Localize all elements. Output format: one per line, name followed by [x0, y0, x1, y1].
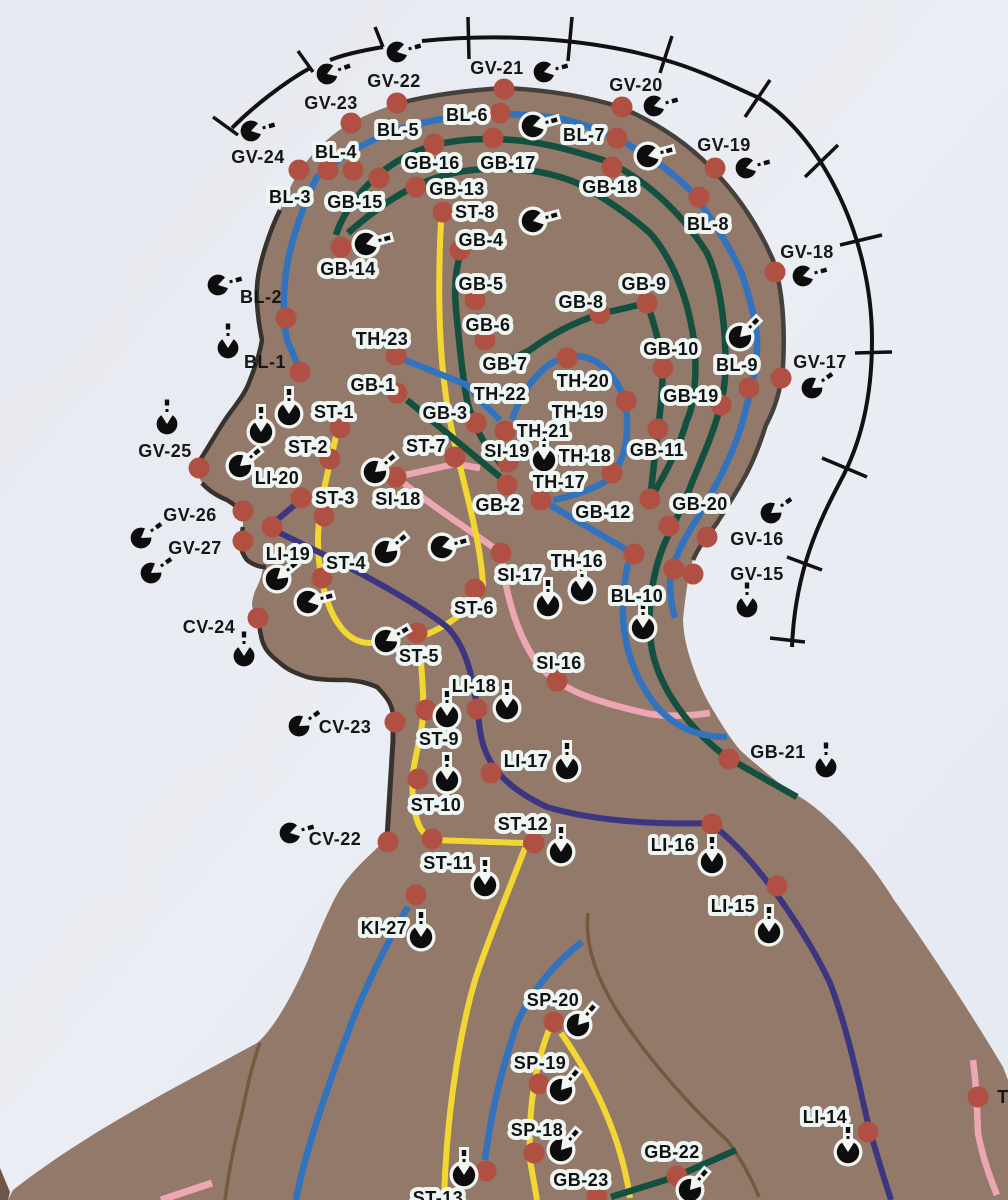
point labels on the body: GB-14: [320, 259, 376, 279]
point labels on the body: GB-5: [458, 274, 504, 294]
meridian: blue bladder and triple heater: [284, 114, 757, 1200]
point labels on the body: BL-8: [687, 214, 729, 234]
meridian: purple large intestine: [277, 503, 891, 1200]
point labels outside the body: GV-17: [793, 352, 847, 372]
point labels on the body: LI-16: [651, 835, 695, 855]
point labels outside the body: GV-27: [168, 538, 222, 558]
point labels on the body: BL-7: [563, 125, 605, 145]
point labels on the body: SP-20: [527, 990, 579, 1010]
point labels on the body: BL-4: [315, 142, 357, 162]
point labels on the body: GB-18: [582, 177, 638, 197]
needle icons outside the body: [127, 36, 838, 846]
point labels on the body: KI-27: [361, 918, 407, 938]
point labels on the body: LI-19: [266, 544, 310, 564]
point labels on the body: TH-17: [533, 472, 585, 492]
point labels on the body: TH-16: [551, 551, 603, 571]
point labels on the body: LI-18: [452, 676, 496, 696]
meridian: pink small intestine: [161, 464, 997, 1200]
point labels outside the body: GV-15: [730, 564, 784, 584]
point labels on the body: GB-13: [429, 179, 485, 199]
point labels on the body: ST-10: [411, 795, 461, 815]
point labels on the body: GB-2: [475, 495, 521, 515]
point labels on the body: GB-12: [575, 502, 631, 522]
point labels on the body: BL-9: [716, 355, 758, 375]
point labels outside the body: GV-21: [470, 58, 524, 78]
point labels outside the body: CV-22: [309, 829, 361, 849]
point labels on the body: LI-14: [803, 1107, 847, 1127]
body fold lines: [225, 913, 759, 1200]
point labels on the body: GB-6: [465, 315, 511, 335]
point labels on the body: GB-20: [672, 494, 728, 514]
point labels outside the body: CV-24: [183, 617, 235, 637]
point labels on the body: GB-17: [480, 153, 536, 173]
point labels outside the body: GV-22: [367, 71, 421, 91]
point labels on the body: GB-3: [422, 403, 468, 423]
point labels outside the body: GV-26: [163, 505, 217, 525]
point labels on the body: ST-7: [406, 436, 446, 456]
point labels on the body: GB-8: [558, 292, 604, 312]
needle icons on the body: [220, 105, 863, 1200]
point labels on the body: BL-3: [269, 187, 311, 207]
point labels outside the body: [138, 58, 1008, 1107]
point labels on the body: ST-11: [423, 853, 473, 873]
point labels on the body: GB-10: [643, 339, 699, 359]
point labels on the body: TH-23: [356, 329, 408, 349]
point labels on the body: SP-18: [511, 1120, 563, 1140]
point labels on the body: ST-3: [315, 488, 355, 508]
point labels outside the body: GV-24: [231, 147, 285, 167]
point labels on the body: GB-22: [644, 1142, 700, 1162]
point labels on the body: GB-19: [663, 386, 719, 406]
point labels outside the body: BL-1: [244, 352, 286, 372]
point labels outside the body: CV-23: [319, 717, 371, 737]
point labels on the body: GB-1: [350, 375, 396, 395]
point labels on the body: TH-22: [474, 384, 526, 404]
point labels on the body: SI-18: [375, 489, 421, 509]
point labels outside the body: GV-16: [730, 529, 784, 549]
head, face, chin and neck outline: [200, 88, 784, 838]
point labels on the body: TH-19: [552, 402, 604, 422]
point labels on the body: ST-6: [454, 598, 494, 618]
point labels on the body: [255, 105, 847, 1200]
point labels on the body: BL-5: [377, 120, 419, 140]
meridian: green gall bladder: [336, 139, 797, 1197]
point labels on the body: TH-18: [559, 446, 611, 466]
point labels outside the body: GV-18: [780, 242, 834, 262]
point labels on the body: ST-12: [498, 814, 548, 834]
point labels on the body: SI-16: [536, 653, 582, 673]
point labels on the body: SI-19: [484, 441, 530, 461]
point labels on the body: ST-1: [314, 402, 354, 422]
point labels on the body: ST-4: [326, 553, 366, 573]
point labels on the body: LI-20: [255, 468, 299, 488]
point labels outside the body: GB-21: [750, 742, 806, 762]
point labels outside the body: BL-2: [240, 287, 282, 307]
point labels on the body: SI-17: [497, 565, 543, 585]
point labels on the body: ST-2: [288, 437, 328, 457]
point labels on the body: GB-11: [630, 440, 684, 460]
point labels on the body: GB-15: [327, 192, 383, 212]
point labels on the body: GB-7: [482, 354, 528, 374]
point labels on the body: LI-15: [711, 896, 755, 916]
point labels on the body: ST-5: [399, 646, 439, 666]
point labels outside the body: GV-20: [609, 75, 663, 95]
meridian: yellow stomach: [318, 222, 630, 1200]
point labels outside the body: GV-19: [697, 135, 751, 155]
point labels on the body: BL-6: [446, 105, 488, 125]
point labels on the body: TH-21: [517, 421, 569, 441]
point labels on the body: SP-19: [514, 1053, 566, 1073]
measurement arc with ticks: [213, 17, 892, 647]
point labels on the body: GB-9: [621, 274, 667, 294]
acupoints: [188, 78, 988, 1200]
point labels on the body: ST-9: [419, 729, 459, 749]
point labels on the body: GB-16: [404, 153, 460, 173]
lower left arm corner: [0, 1168, 10, 1200]
point labels on the body: GB-23: [553, 1170, 609, 1190]
point labels on the body: LI-17: [504, 751, 548, 771]
point labels outside the body: GV-23: [304, 93, 358, 113]
point labels on the body: BL-10: [611, 586, 663, 606]
point labels on the body: TH-20: [557, 371, 609, 391]
point labels outside the body: GV-25: [138, 441, 192, 461]
point labels on the body: GB-4: [458, 230, 504, 250]
point labels on the body: ST-8: [455, 202, 495, 222]
